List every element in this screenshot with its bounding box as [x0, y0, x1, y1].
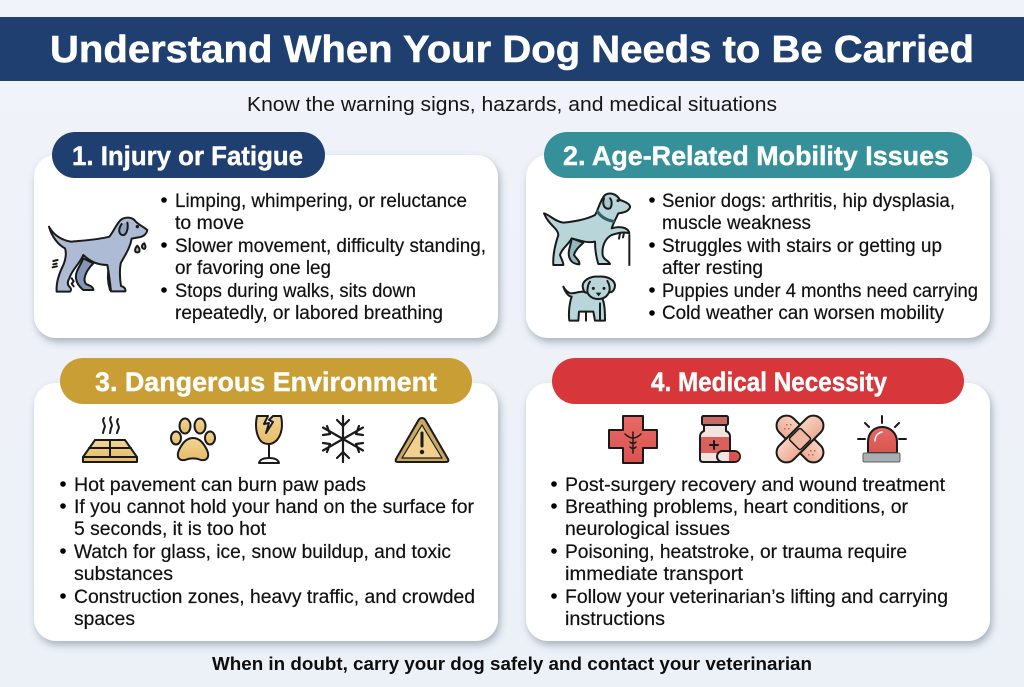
icon: warning triangle: [396, 418, 448, 462]
panel: dangerous environment: [34, 358, 498, 641]
icon: senior dog with cane: [544, 193, 630, 265]
bullet list: Follow your veterinarian’s lifting and carrying: [565, 587, 948, 608]
icon: paw print: [171, 418, 215, 460]
heading: age-related mobility: 2. Age-Related Mobility Issues: [563, 141, 949, 171]
bullet list: Senior dogs: arthritis, hip dysplasia,: [662, 191, 955, 212]
icon: puppy: [563, 277, 615, 321]
bullet list: 5 seconds, it is too hot: [74, 519, 267, 540]
bullet list: or favoring one leg: [175, 258, 331, 279]
bullet list: If you cannot hold your hand on the surface for: [74, 497, 475, 518]
bullet list: Puppies under 4 months need carrying: [662, 281, 978, 302]
bullet list: [551, 475, 948, 630]
subtitle: Know the warning signs, hazards, and medical situations: [247, 93, 777, 116]
icon: emergency siren: [858, 416, 906, 462]
heading: injury or fatigue: 1. Injury or Fatigue: [72, 141, 303, 171]
bullet list: [60, 475, 475, 630]
bullet list: repeatedly, or labored breathing: [175, 303, 443, 324]
heading: medical necessity: 4. Medical Necessity: [651, 367, 887, 397]
bullet list: to move: [175, 213, 244, 234]
icon: crossed bandages: [772, 411, 828, 467]
bullet list: Stops during walks, sits down: [175, 281, 416, 302]
bullet list: Poisoning, heatstroke, or trauma require: [565, 542, 907, 563]
bullet list: [649, 191, 978, 324]
bullet list: neurological issues: [565, 519, 730, 540]
bullet list: Limping, whimpering, or reluctance: [175, 191, 467, 212]
bullet list: Construction zones, heavy traffic, and crowded: [74, 587, 475, 608]
bullet list: Breathing problems, heart conditions, or: [565, 497, 909, 518]
bullet list: [161, 191, 486, 324]
icon: medical cross: [609, 416, 657, 463]
heading: dangerous environment: 3. Dangerous Environment: [95, 367, 437, 397]
heading: age-related mobility: [544, 132, 972, 178]
icon: medicine bottle and pill: [700, 416, 740, 462]
panel: age-related mobility: [526, 132, 990, 338]
icon: limping dog: [49, 218, 147, 292]
bullet list: muscle weakness: [662, 213, 811, 234]
bullet list: Struggles with stairs or getting up: [662, 236, 942, 257]
heading: dangerous environment: [60, 358, 472, 404]
bullet list: Post-surgery recovery and wound treatment: [565, 475, 946, 496]
heading: injury or fatigue: [52, 132, 325, 178]
title banner: [0, 17, 1024, 81]
panel: injury or fatigue: [34, 132, 498, 338]
footer note: When in doubt, carry your dog safely and contact your veterinarian: [212, 653, 812, 674]
bullet list: Hot pavement can burn paw pads: [74, 475, 366, 496]
title banner: Understand When Your Dog Needs to Be Carried: [50, 29, 974, 71]
bullet list: after resting: [662, 258, 763, 279]
bullet list: Cold weather can worsen mobility: [662, 303, 944, 324]
bullet list: spaces: [74, 609, 135, 630]
icon: snowflake: [323, 416, 363, 462]
bullet list: immediate transport: [565, 564, 744, 585]
bullet list: Slower movement, difficulty standing,: [175, 236, 486, 257]
bullet list: instructions: [565, 609, 665, 630]
icon: hot pavement: [83, 417, 137, 462]
icon: broken glass: [256, 416, 282, 463]
bullet list: substances: [74, 564, 173, 585]
panel: medical necessity: [526, 358, 990, 641]
bullet list: Watch for glass, ice, snow buildup, and toxic: [74, 542, 451, 563]
heading: medical necessity: [552, 358, 964, 404]
